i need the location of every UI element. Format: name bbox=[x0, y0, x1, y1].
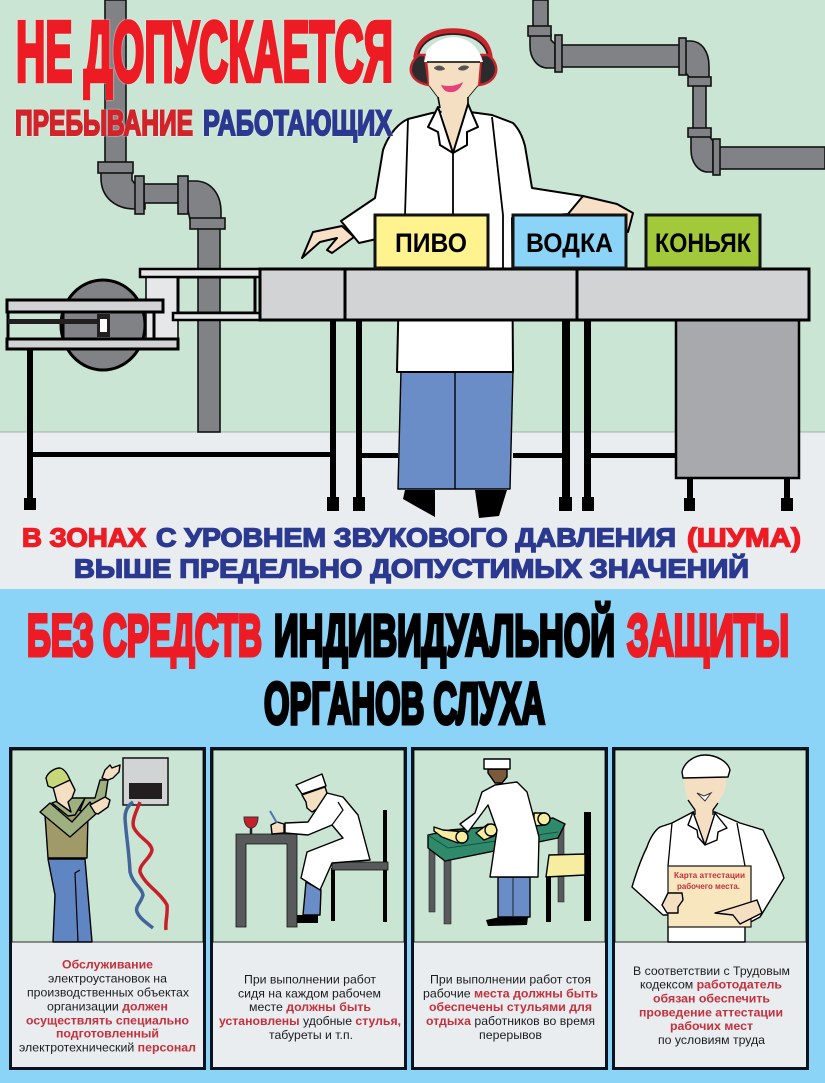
caption: рабочие места должны быть bbox=[423, 986, 598, 1000]
caption: проведение аттестации bbox=[639, 1005, 783, 1019]
coat bbox=[341, 110, 583, 372]
neck bbox=[440, 94, 468, 153]
panel 4: workplace certification bbox=[614, 748, 808, 1068]
electrical box bbox=[123, 758, 168, 805]
caption: При выполнении работ стоя bbox=[430, 973, 591, 987]
lower blue background bbox=[0, 589, 825, 1083]
machine spindle bbox=[8, 314, 110, 337]
caption: сидя на каждом рабочем bbox=[238, 986, 381, 1000]
cap line bbox=[427, 61, 480, 63]
machine body bbox=[8, 312, 154, 339]
text: НЕ ДОПУСКАЕТСЯ bbox=[16, 5, 393, 100]
red cable bbox=[133, 802, 167, 930]
hands bbox=[662, 893, 762, 924]
product box: cognac: КОНЬЯК bbox=[655, 228, 751, 258]
chair bbox=[546, 812, 591, 922]
caption: электротехнический персонал bbox=[19, 1041, 196, 1055]
box slot bbox=[129, 783, 162, 799]
caption: кодексом работодатель bbox=[640, 978, 782, 992]
heading line 1 bbox=[27, 602, 789, 668]
blue cable bbox=[125, 802, 153, 928]
subtitle: РАБОТАЮЩИХ bbox=[203, 103, 392, 143]
picture area bbox=[414, 750, 605, 942]
panel 1: electrical installations bbox=[10, 748, 204, 1068]
panel 2: seated work bbox=[212, 748, 406, 1068]
shoes bbox=[403, 490, 507, 518]
machine top bar bbox=[7, 300, 163, 312]
standing worker bbox=[460, 759, 539, 926]
left pipe system bbox=[98, 0, 225, 432]
caption: обеспечены стульями для bbox=[429, 1000, 592, 1014]
caption: Обслуживание bbox=[62, 958, 153, 972]
chair bbox=[331, 810, 388, 922]
green table bbox=[428, 818, 565, 924]
upper rail bbox=[140, 269, 260, 277]
inner frame bbox=[178, 277, 255, 313]
caption: обязан обеспечить bbox=[653, 992, 770, 1006]
saw disc bbox=[61, 280, 145, 370]
caption: осуществлять специально bbox=[26, 1013, 189, 1027]
certification card: рабочего места. bbox=[677, 882, 740, 891]
noise zone line 1: В ЗОНАХ bbox=[22, 522, 147, 552]
caption bbox=[633, 964, 790, 1047]
face bbox=[428, 62, 480, 97]
caption: отдыха работников во время bbox=[426, 1014, 595, 1028]
table top sections bbox=[260, 269, 809, 320]
spindle window bbox=[100, 319, 107, 332]
crossbars bbox=[33, 452, 676, 458]
product box: vodka: ВОДКА bbox=[526, 228, 613, 258]
caption: перерывов bbox=[479, 1028, 542, 1042]
neck outline bbox=[429, 85, 478, 108]
machine bottom bar bbox=[7, 339, 178, 349]
picture area bbox=[615, 750, 806, 942]
caption: табуреты и т.п. bbox=[269, 1028, 353, 1042]
product box: beer bbox=[375, 215, 488, 268]
left hand bbox=[302, 226, 354, 258]
wall background bbox=[0, 0, 825, 432]
caption bbox=[219, 973, 401, 1042]
noise zone line 1: (ШУМА) bbox=[687, 522, 801, 552]
ear cup right bbox=[479, 55, 496, 85]
product box: vodka bbox=[513, 215, 626, 268]
rolls of dough bbox=[434, 813, 550, 843]
caption: электроустановок на bbox=[48, 972, 167, 986]
product box: cognac bbox=[646, 215, 760, 268]
headband of ear defenders bbox=[416, 31, 490, 58]
noise zone line 2: ВЫШЕ ПРЕДЕЛЬНО ДОПУСТИМЫХ ЗНАЧЕНИЙ bbox=[74, 554, 749, 584]
trousers bbox=[398, 370, 513, 489]
heading line 1: БЕЗ СРЕДСТВ bbox=[27, 604, 262, 668]
panel 3: standing work bbox=[412, 748, 606, 1068]
noise zone line 1 bbox=[22, 522, 801, 552]
picture area bbox=[12, 750, 203, 942]
right pipe system bbox=[528, 0, 825, 175]
cap bbox=[424, 37, 483, 62]
right hand bbox=[566, 196, 633, 232]
cabinet bbox=[676, 320, 799, 478]
caption: При выполнении работ bbox=[244, 973, 377, 987]
caption: по условиям труда bbox=[658, 1033, 765, 1047]
caption: подготовленный bbox=[56, 1027, 159, 1041]
table legs bbox=[24, 320, 793, 511]
worker bbox=[40, 765, 120, 942]
picture area bbox=[213, 750, 404, 942]
noise zone line 1: С УРОВНЕМ ЗВУКОВОГО ДАВЛЕНИЯ bbox=[156, 522, 676, 552]
floor background bbox=[0, 432, 825, 589]
table bbox=[236, 834, 297, 927]
caption bbox=[423, 973, 598, 1042]
caption: организации должен bbox=[47, 999, 168, 1013]
coat seams bbox=[405, 117, 503, 268]
heading line 2: ОРГАНОВ СЛУХА bbox=[264, 672, 545, 736]
worker with card bbox=[632, 755, 784, 942]
collar bbox=[428, 104, 478, 153]
caption bbox=[19, 958, 196, 1055]
caption: рабочих мест bbox=[670, 1019, 753, 1033]
caption: месте должны быть bbox=[249, 1000, 371, 1014]
certification card bbox=[668, 866, 751, 927]
subtitle: ПРЕБЫВАНИЕ bbox=[15, 103, 193, 143]
worker in white coat with ear defenders bbox=[302, 31, 633, 518]
product box: beer: ПИВО bbox=[395, 228, 467, 258]
guard block bbox=[146, 276, 178, 348]
headband inner line bbox=[418, 34, 488, 56]
ear cup left bbox=[411, 55, 429, 85]
caption: В соответствии с Трудовым bbox=[633, 964, 790, 978]
eyes bbox=[434, 66, 469, 70]
seated worker bbox=[270, 774, 370, 923]
machine table bbox=[7, 269, 809, 511]
caption: установлены удобные стулья, bbox=[219, 1014, 401, 1028]
subtitle bbox=[15, 103, 392, 143]
smile bbox=[441, 82, 463, 92]
wine glass bbox=[244, 817, 258, 834]
lower rail bbox=[173, 313, 260, 320]
caption: производственных объектах bbox=[27, 986, 189, 1000]
certification card: Карта аттестации bbox=[674, 871, 745, 880]
